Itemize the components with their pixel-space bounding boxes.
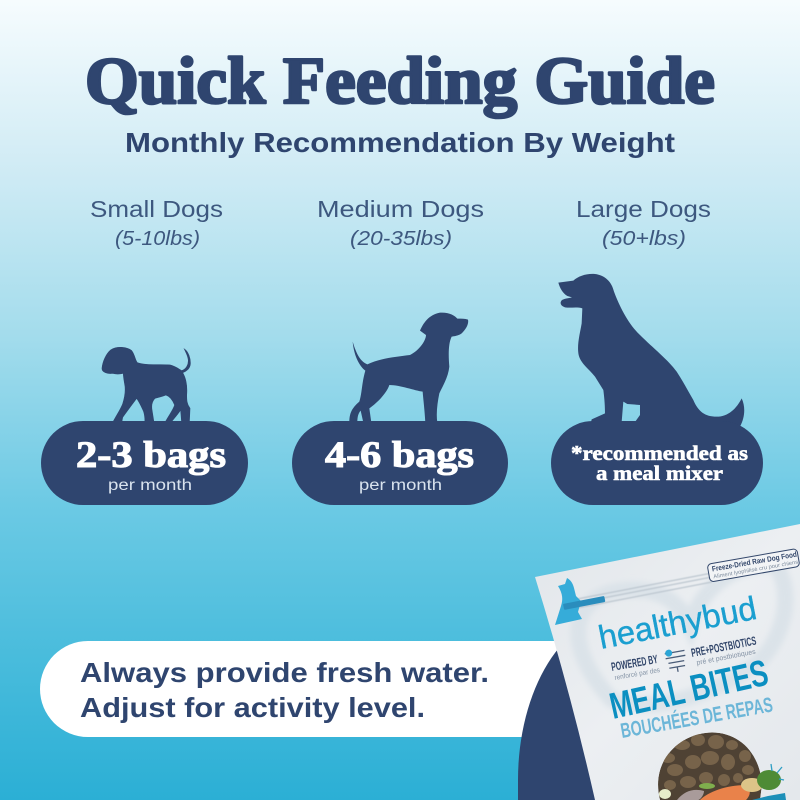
label: medium dogs: Medium Dogs xyxy=(317,196,484,222)
pill: large dogs xyxy=(551,421,763,505)
label outline xyxy=(707,549,800,582)
kibble window xyxy=(658,733,762,800)
cheese piece xyxy=(741,778,763,792)
brand name: healthybud xyxy=(595,589,759,656)
amount: medium dogs: 4-6 bags xyxy=(325,435,474,476)
column: medium dogs xyxy=(292,196,508,505)
label text french: Aliment lyophilisé cru pour chiens xyxy=(713,560,799,580)
note line 1: *recommended as xyxy=(571,441,748,465)
powered by: POWERED BY xyxy=(610,652,659,674)
fish piece xyxy=(677,790,704,800)
salmon xyxy=(700,785,750,800)
heart watermark xyxy=(578,564,785,705)
icon: small dog silhouette xyxy=(102,347,190,423)
zipper lines xyxy=(572,573,712,609)
bag body xyxy=(535,524,800,800)
label: large dogs: Large Dogs xyxy=(576,196,711,222)
label: small dogs: Small Dogs xyxy=(90,196,223,222)
icon: medium dog silhouette xyxy=(349,313,468,423)
navy circle behind bag xyxy=(518,615,722,800)
column: large dogs xyxy=(551,196,763,505)
subtitle: Monthly Recommendation By Weight xyxy=(125,127,675,158)
per month: small dogs: per month xyxy=(108,477,192,494)
pre and postbiotics french: pré et postbiotiques xyxy=(696,649,757,667)
callout line 2: Adjust for activity level. xyxy=(80,692,425,723)
cauliflower xyxy=(659,789,671,799)
weight: medium dogs: (20-35lbs) xyxy=(350,227,452,250)
pill: medium dogs xyxy=(292,421,508,505)
pill: small dogs xyxy=(41,421,248,505)
icon: large dog silhouette xyxy=(558,274,744,427)
icon: bag logo dog xyxy=(555,578,605,625)
note line 2: a meal mixer xyxy=(596,461,723,485)
herb xyxy=(699,783,715,789)
blue band xyxy=(752,793,786,800)
powered by french: renforcé par des xyxy=(614,667,661,682)
column: small dogs xyxy=(41,196,248,505)
spark lines xyxy=(771,764,784,780)
label: freeze dried xyxy=(707,549,800,582)
weight: large dogs: (50+lbs) xyxy=(602,227,686,250)
callout background xyxy=(40,641,600,737)
note: meal mixer xyxy=(571,441,748,485)
title: Quick Feeding Guide xyxy=(85,44,715,118)
callout: water and activity xyxy=(40,641,600,737)
icon: gut xyxy=(664,647,688,674)
per month: medium dogs: per month xyxy=(359,477,442,494)
amount: small dogs: 2-3 bags xyxy=(76,435,226,476)
product bag xyxy=(535,524,800,800)
weight: small dogs: (5-10lbs) xyxy=(115,227,200,250)
broccoli xyxy=(757,770,781,790)
callout line 1: Always provide fresh water. xyxy=(80,657,489,688)
